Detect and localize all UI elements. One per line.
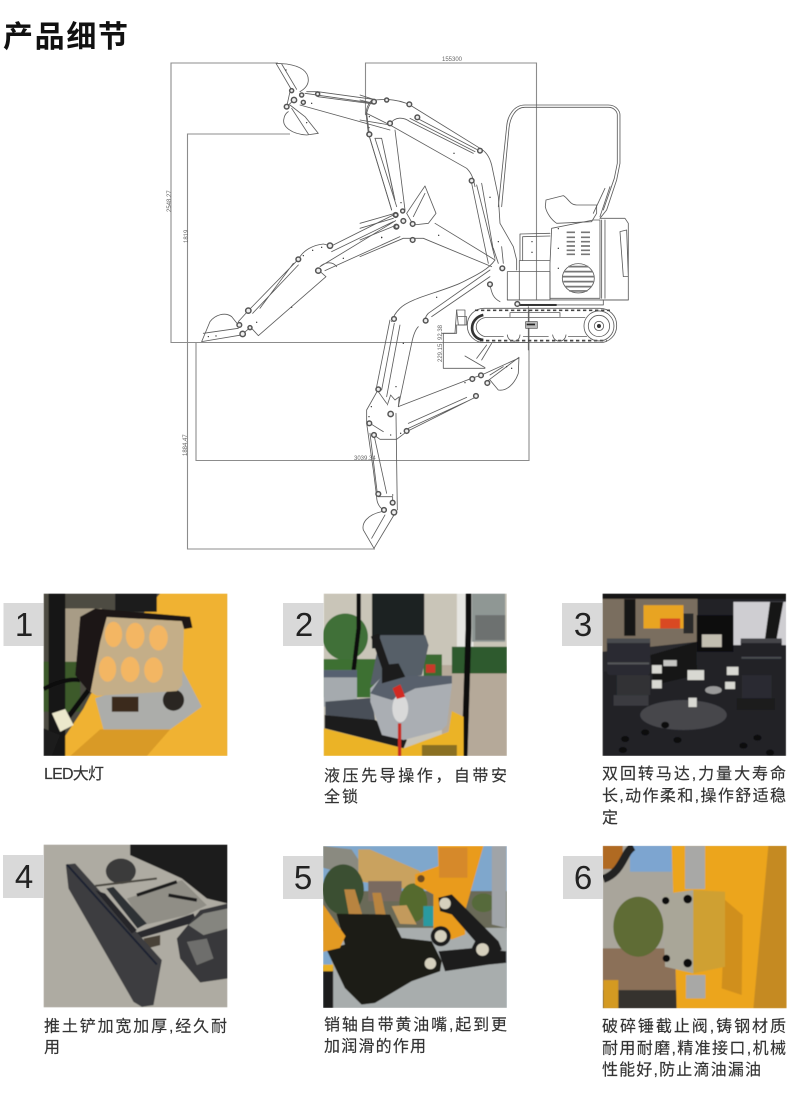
- caption 5: 销轴自带黄油嘴,起到更: [324, 1016, 507, 1034]
- caption 6: 破碎锤截止阀,铸钢材质: [602, 1018, 786, 1036]
- caption 6: [602, 1018, 786, 1079]
- caption 3: 长,动作柔和,操作舒适稳: [602, 787, 786, 805]
- caption 5: [324, 1016, 507, 1056]
- caption 2: 液压先导操作，自带安: [324, 767, 507, 785]
- dimension lines: 155300: [442, 57, 463, 63]
- dimension lines: 2548.27: [167, 190, 173, 212]
- caption 2: [324, 767, 507, 806]
- number badge 4: [3, 855, 44, 898]
- dimension lines: 3039.34: [354, 456, 376, 462]
- excavator body, cab, track: [360, 95, 628, 350]
- number badge 2: 2: [295, 606, 313, 643]
- caption 3: 定: [602, 809, 618, 827]
- caption 4: [44, 1018, 227, 1056]
- caption 6: 耐用耐磨,精准接口,机械: [602, 1040, 786, 1058]
- caption 4: 用: [44, 1040, 60, 1056]
- panel: 1 LED light: [4, 594, 227, 783]
- panel: 5 pin with grease nipple: [283, 846, 507, 1056]
- dimension lines: 92.38: [438, 324, 444, 340]
- caption 2: 全锁: [324, 788, 358, 806]
- photo: bucket pin and grease nipple: [323, 846, 507, 1008]
- caption 5: 加润滑的作用: [324, 1038, 426, 1056]
- panel: 6 breaker check valve: [563, 846, 787, 1079]
- photo: dozer blade: [44, 844, 228, 1008]
- number badge 3: 3: [574, 606, 592, 643]
- caption 4: 推土铲加宽加厚,经久耐: [44, 1018, 227, 1036]
- title: 产品细节: [3, 21, 128, 54]
- number badge 4: 4: [15, 858, 33, 895]
- excavator arm pose, lower part and dozer blade: [363, 310, 519, 548]
- dimension lines: 1819: [184, 229, 190, 243]
- excavator arm poses, left part: [202, 63, 400, 342]
- caption 3: 双回转马达,力量大寿命: [602, 765, 786, 783]
- dimension lines: [167, 57, 536, 549]
- dimension lines: 1884.47: [183, 434, 189, 456]
- number badge 6: [563, 856, 603, 899]
- number badge 2: [283, 603, 324, 646]
- photo: check valve block: [602, 846, 787, 1008]
- panel: 4 dozer blade: [3, 844, 228, 1056]
- number badge 1: 1: [15, 606, 33, 643]
- number badge 1: [4, 603, 44, 646]
- chart: excavator dimension drawing: [167, 57, 628, 549]
- number badge 6: 6: [574, 859, 592, 896]
- caption 1: LED大灯: [44, 765, 104, 783]
- photo: operator seat and joystick: [324, 594, 507, 756]
- number badge 3: [562, 603, 602, 646]
- photo: dual swing motors: [602, 594, 786, 756]
- number badge 5: [283, 856, 323, 899]
- caption 3: [602, 765, 786, 827]
- caption 6: 性能好,防止滴油漏油: [602, 1061, 761, 1079]
- number badge 5: 5: [294, 859, 312, 896]
- panel: 2 pilot operation: [283, 594, 507, 806]
- dimension lines: 229.15: [438, 343, 444, 362]
- panel: 3 dual swing motors: [562, 594, 786, 827]
- photo: LED work light: [44, 594, 228, 756]
